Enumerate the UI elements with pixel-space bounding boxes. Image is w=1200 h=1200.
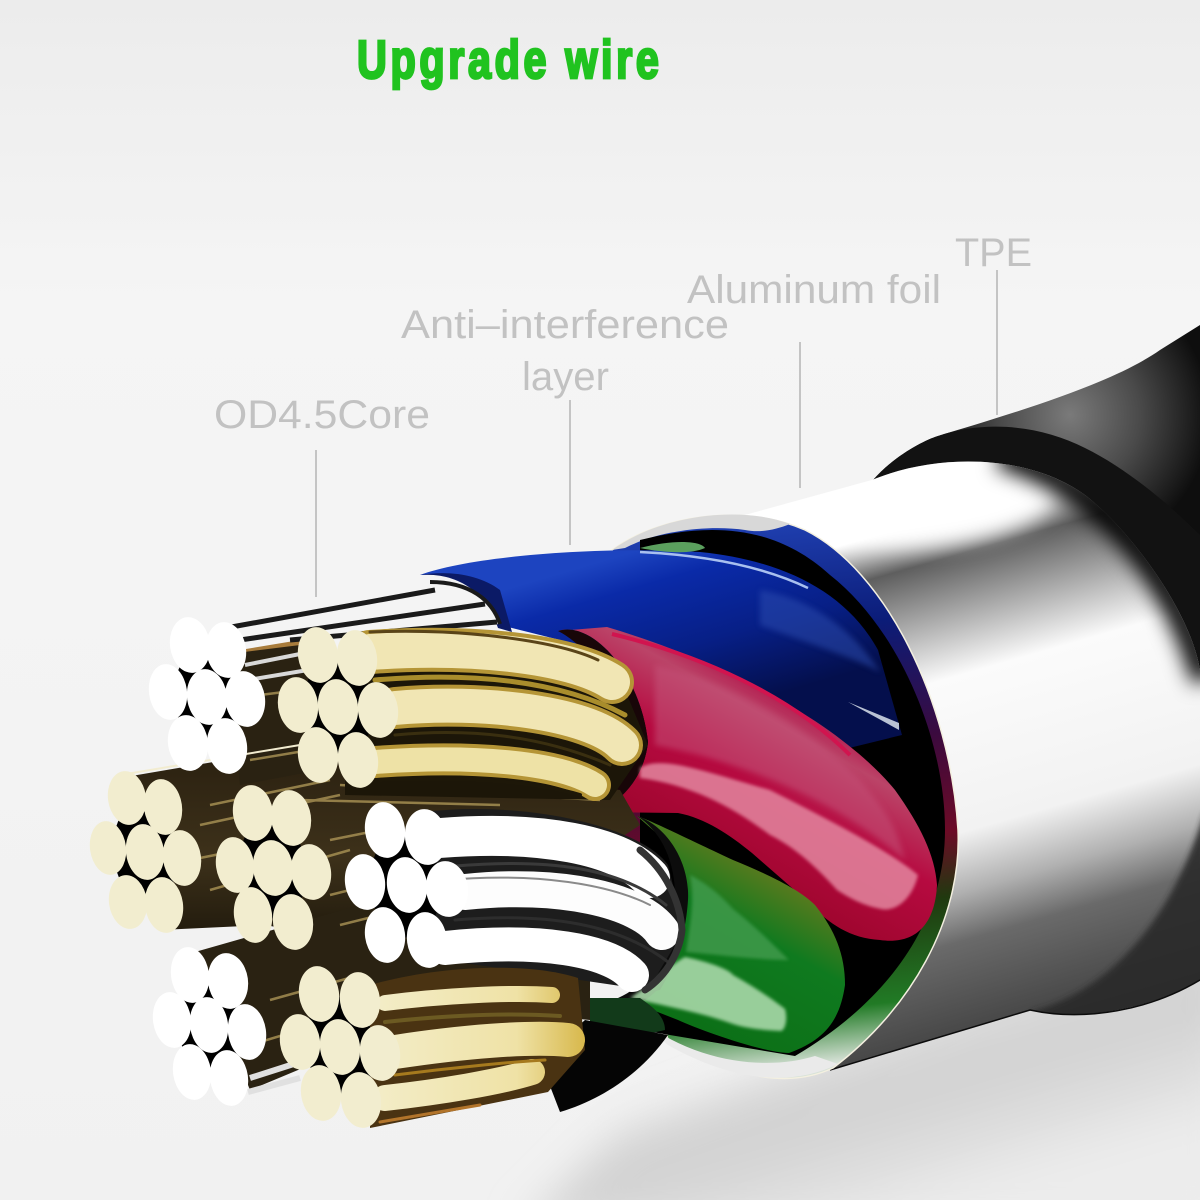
opening rim <box>612 515 958 1079</box>
black shadow under wires <box>540 1020 668 1112</box>
strand tips: gold bundle 3 <box>86 769 205 935</box>
floor shadow <box>520 900 1200 1200</box>
strands: upper gold <box>345 631 648 800</box>
label: Anti-interference layer: layer <box>522 355 609 399</box>
wire: blue <box>420 542 902 760</box>
TPE black jacket <box>873 325 1200 700</box>
label: Anti-interference layer <box>401 303 729 545</box>
wire: red <box>558 627 937 941</box>
rim light bottom <box>640 1020 838 1078</box>
strand tips: gold bundle 4 <box>212 782 335 953</box>
label: TPE: TPE <box>955 231 1032 275</box>
strand tips: white bundle 1 <box>145 614 269 777</box>
rim light top <box>612 515 790 550</box>
strand tips: white bundle 6 <box>149 945 270 1108</box>
strands: top silver <box>205 580 500 650</box>
strands: lower gold <box>370 968 585 1128</box>
strand tips: white bundle 5 <box>341 799 472 971</box>
wire: green <box>590 816 845 1053</box>
strand tips: gold bundle 2 <box>274 624 402 791</box>
label: Anti-interference layer: Anti–interference <box>401 303 729 347</box>
title: Upgrade wire <box>357 31 659 90</box>
aluminum foil tube <box>746 462 1200 1071</box>
strand tips: gold bundle 7 <box>276 963 404 1131</box>
label: Aluminum foil: Aluminum foil <box>687 268 941 312</box>
opening interior <box>640 530 945 1056</box>
strands: middle silver <box>425 809 684 990</box>
strands: dark core background <box>120 628 640 1092</box>
label: OD4.5Core: OD4.5Core <box>214 393 430 437</box>
